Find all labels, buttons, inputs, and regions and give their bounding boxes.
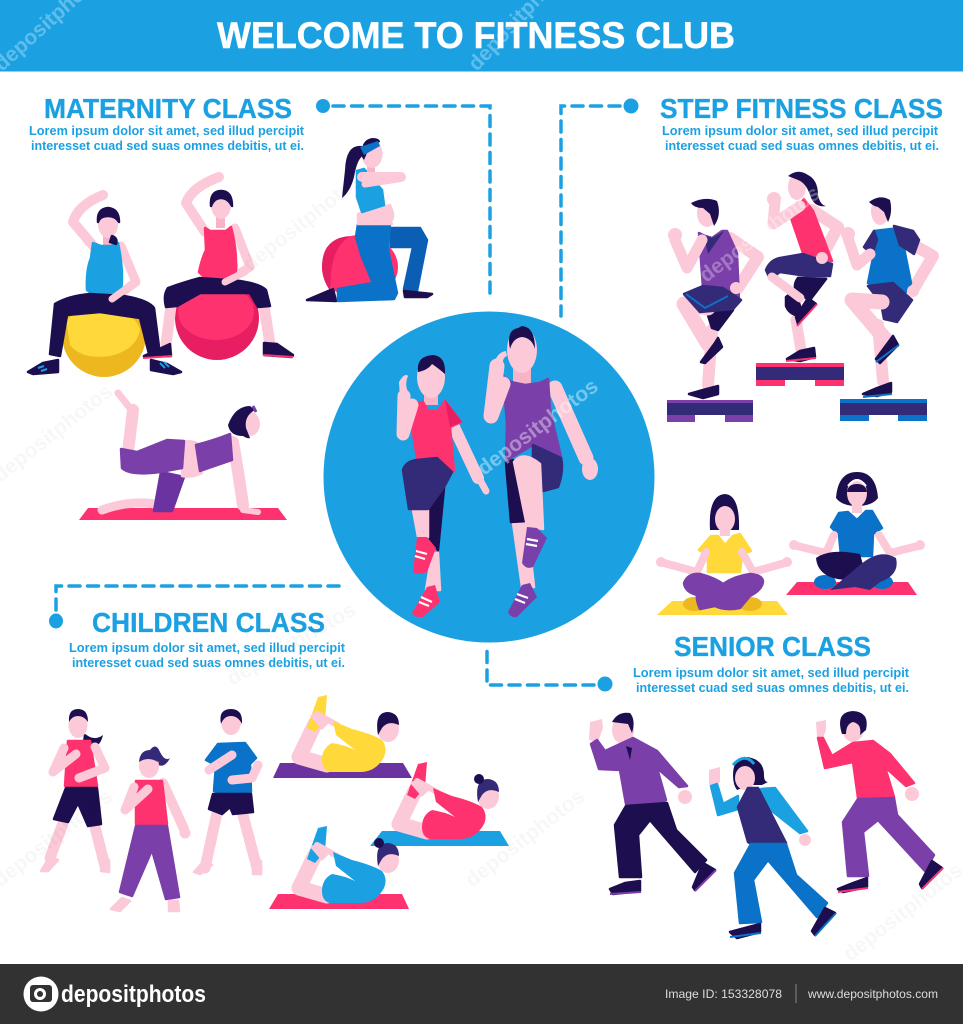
step platform: blue <box>840 399 927 421</box>
header banner <box>0 0 963 72</box>
watermarks: depositphotos <box>695 182 825 287</box>
text: step fitness description: interesset cuad sed suas omnes debitis, ut ei. <box>665 138 939 153</box>
text: senior description: Lorem ipsum dolor sit amet, sed illud percipit <box>633 665 910 680</box>
children: bow pose, pink on blue mat <box>370 762 509 846</box>
children: bow pose, blue on pink mat <box>269 826 409 909</box>
watermarks: depositphotos <box>239 169 367 276</box>
man in centre <box>491 326 598 617</box>
heading: step fitness class: STEP FITNESS CLASS <box>660 93 943 124</box>
watermarks: depositphotos <box>473 375 603 480</box>
senior: woman in pink top <box>816 711 943 892</box>
text: children description: interesset cuad sed suas omnes debitis, ut ei. <box>72 655 345 670</box>
heading: maternity class: MATERNITY CLASS <box>44 93 292 124</box>
text: step fitness description <box>662 123 939 153</box>
connector: senior <box>487 647 612 692</box>
header banner: WELCOME TO FITNESS CLUB <box>217 15 735 56</box>
senior: woman in blue sleeves <box>709 757 836 938</box>
maternity: woman kneeling with ball <box>307 138 432 301</box>
woman in centre <box>399 355 486 617</box>
senior: man in purple jacket <box>589 713 716 894</box>
icon: camera logo <box>24 976 58 1012</box>
maternity: woman on yellow ball <box>28 195 181 377</box>
text: children description: Lorem ipsum dolor sit amet, sed illud percipit <box>69 640 346 655</box>
children: girl with black shorts <box>41 709 109 872</box>
maternity: woman on hands and knees on mat <box>79 393 287 520</box>
heading: children class: CHILDREN CLASS <box>92 607 325 638</box>
text: maternity description: interesset cuad sed suas omnes debitis, ut ei. <box>31 138 304 153</box>
step fitness: man in purple <box>667 199 758 422</box>
bow figure: blue <box>299 826 399 903</box>
text: senior description: interesset cuad sed suas omnes debitis, ut ei. <box>636 680 909 695</box>
bow figure: pink <box>399 762 499 839</box>
text: senior description <box>633 665 910 695</box>
senior: seated woman in yellow on mat <box>656 494 792 615</box>
connector: children <box>49 586 340 628</box>
children: girl in purple pants <box>111 746 190 911</box>
step fitness: man in blue <box>840 197 933 421</box>
connector: maternity <box>316 99 490 297</box>
senior: seated woman in blue on mat <box>786 472 925 595</box>
step platform: pink <box>756 363 844 386</box>
footer bar: Image ID: 153328078 <box>665 987 782 1001</box>
central circle with couple <box>324 312 654 642</box>
text: maternity description: Lorem ipsum dolor sit amet, sed illud percipit <box>29 123 305 138</box>
children: boy in blue tee <box>194 709 261 874</box>
footer bar <box>0 964 963 1024</box>
text: children description <box>69 640 346 670</box>
text: step fitness description: Lorem ipsum dolor sit amet, sed illud percipit <box>662 123 939 138</box>
heading: senior class: SENIOR CLASS <box>674 631 871 662</box>
watermarks: depositphotos <box>223 598 360 690</box>
maternity: woman on pink ball <box>143 177 293 360</box>
footer bar: depositphotos <box>61 981 206 1008</box>
footer bar: www.depositphotos.com <box>807 987 938 1001</box>
children: bow pose, yellow on purple mat <box>273 695 412 778</box>
connector: step fitness <box>561 98 638 316</box>
step platform: purple <box>667 400 753 422</box>
watermarks: depositphotos <box>461 785 589 892</box>
text: maternity description <box>29 123 305 153</box>
bow figure: yellow <box>299 695 399 772</box>
step fitness: woman in pink <box>756 172 844 386</box>
